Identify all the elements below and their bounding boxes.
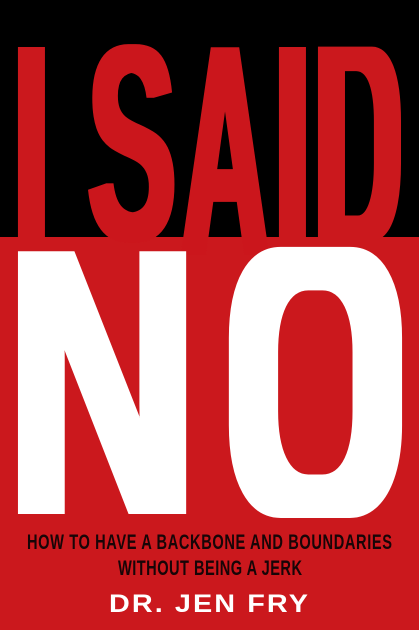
title: I SAID (5, 0, 387, 319)
black top panel (0, 0, 419, 237)
title: NO: O (257, 237, 374, 527)
subtitle: WITHOUT BEING A JERK (118, 555, 303, 580)
red bottom panel (0, 237, 419, 630)
title: NO (7, 168, 374, 595)
author: DR. JEN FRY (109, 590, 308, 618)
subtitle: HOW TO HAVE A BACKBONE AND BOUNDARIES (27, 529, 392, 554)
subtitle (27, 529, 392, 580)
title: I SAID: D (330, 21, 387, 267)
title: NO: N (7, 168, 197, 595)
